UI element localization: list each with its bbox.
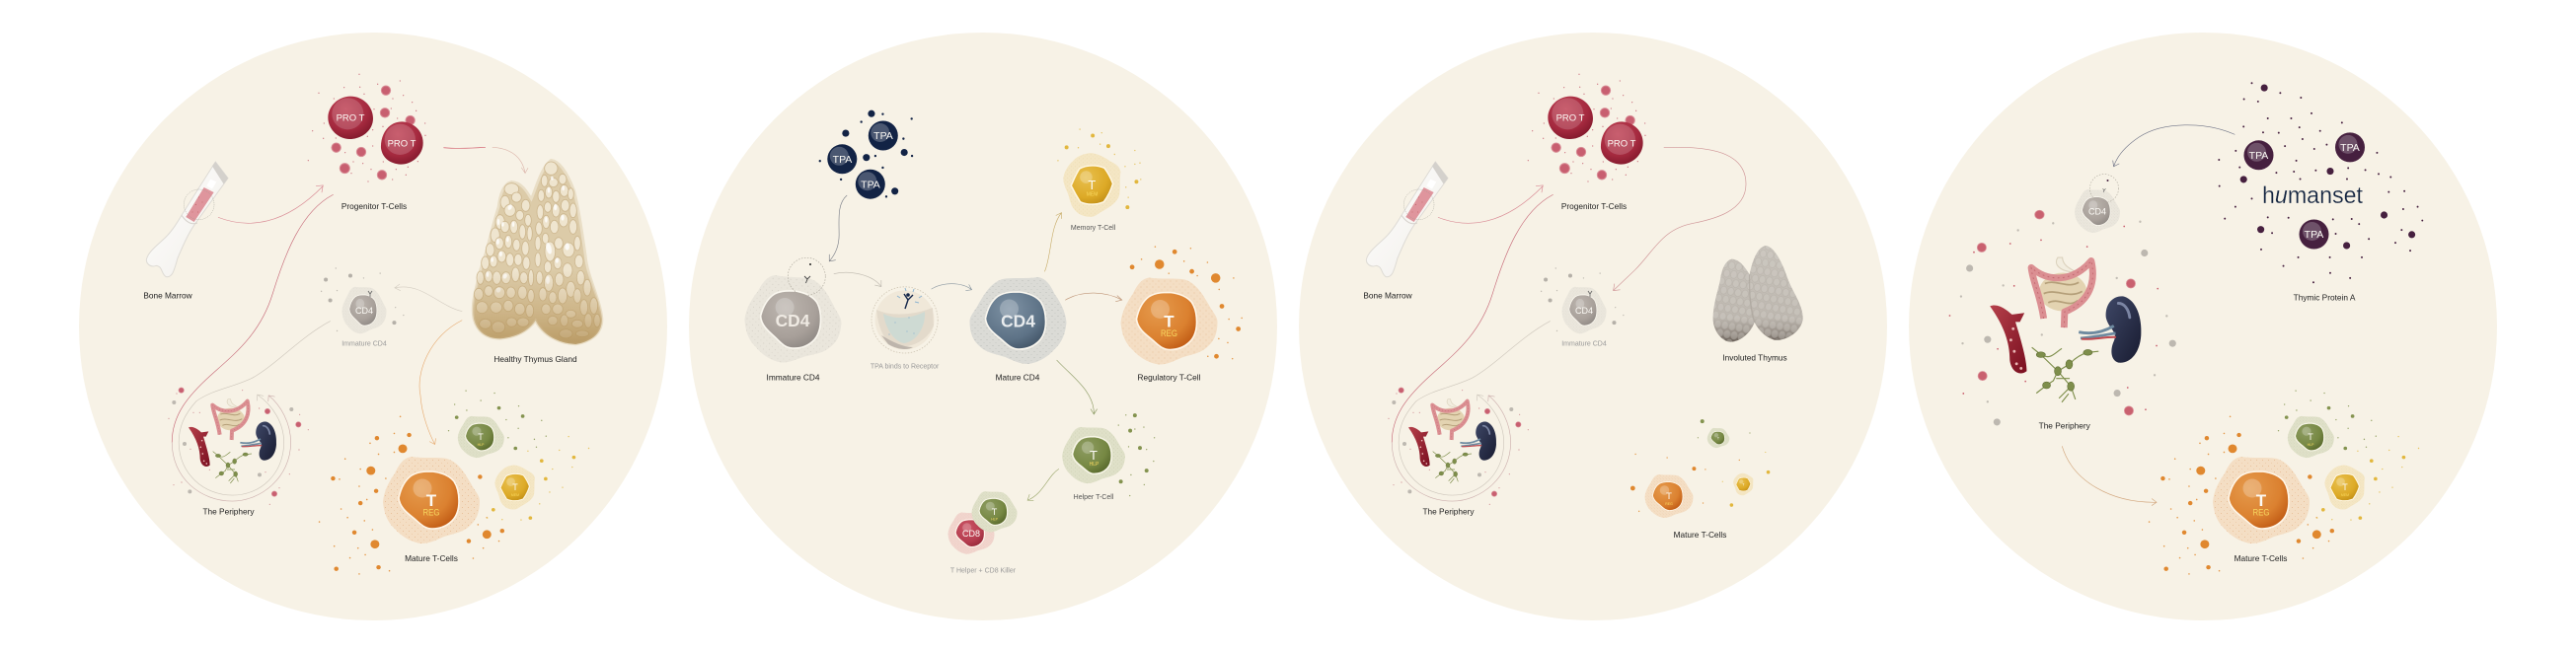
helper T-cell [1062, 413, 1155, 496]
mature T-cells: REG [2252, 507, 2270, 517]
the periphery: organs enlarged [1949, 210, 2176, 425]
TPA molecules: TPA [833, 154, 852, 166]
T helper with CD8 killer: CD8 [962, 529, 980, 539]
mature T-cells [2150, 391, 2419, 574]
mature T-cells: T [2342, 482, 2348, 492]
mature CD4 cell [969, 277, 1066, 364]
label: involuted thymus: Involuted Thymus [1722, 353, 1787, 363]
mature T-cells: T [512, 482, 518, 492]
reduced mature T-cells: T [1717, 436, 1720, 440]
immature CD4 cell: CD4 [355, 306, 373, 316]
panel: healthy thymus pathway [79, 33, 667, 620]
mature T-cells: MEM [2341, 493, 2349, 497]
panel: TPA maturation pathway [689, 33, 1277, 620]
mature T-cells: T [426, 491, 437, 510]
label: regulatory T-cell: Regulatory T-Cell [1138, 373, 1201, 383]
label: memory T-cell: Memory T-Cell [1071, 225, 1116, 232]
progenitor T-cells [1528, 74, 1645, 181]
panel: thymic protein A and periphery [1909, 33, 2497, 620]
progenitor T-cells: PRO T [1556, 112, 1585, 124]
arrow: progenitor to immature CD4 [1614, 147, 1746, 291]
TPA molecules and dots: TPA [2305, 229, 2323, 241]
icon: bone marrow [1366, 162, 1448, 277]
T helper with CD8 killer: HLP [991, 517, 999, 521]
icon: bone marrow [146, 162, 228, 277]
label: helper T-cell: Helper T-Cell [1074, 494, 1114, 501]
immature CD4 large cell [742, 257, 844, 366]
label: T helper + CD8 killer: T Helper + CD8 Killer [950, 568, 1017, 574]
label: progenitor: Progenitor T-Cells [1561, 201, 1627, 211]
label: periphery: The Periphery [202, 507, 255, 517]
reduced mature T-cells: REG [1665, 502, 1673, 506]
immature CD4 cell with receptor [2075, 174, 2120, 233]
T helper with CD8 killer [947, 491, 1018, 554]
regulatory T-cell [1121, 247, 1242, 365]
reduced mature T-cells [1630, 419, 1770, 518]
label: TPA binds to receptor: TPA binds to Receptor [871, 363, 940, 371]
memory T-cell: MEM [1087, 191, 1098, 197]
label: immature CD4: Immature CD4 [341, 341, 387, 347]
panel: involuted thymus pathway [1299, 33, 1887, 620]
label: bone marrow: Bone Marrow [143, 290, 193, 300]
mature T-cells: HLP [2308, 443, 2314, 447]
mature T-cells: HLP [478, 443, 485, 447]
label: mature T-cells: Mature T-Cells [405, 553, 458, 563]
arrows: panel 1 [172, 147, 528, 501]
mature T-cells: T [2308, 432, 2313, 442]
TPA molecules and dots [2219, 83, 2422, 282]
label: mature T-cells: Mature T-Cells [1674, 530, 1726, 540]
logo: humanset: humanset [2262, 182, 2363, 209]
arrows: panel 2 [829, 195, 1122, 501]
TPA molecules: TPA [873, 130, 893, 142]
label: periphery: The Periphery [2039, 420, 2091, 430]
immature CD4 large cell: CD4 [776, 311, 810, 330]
progenitor T-cells: PRO T [337, 112, 365, 124]
label: mature CD4: Mature CD4 [996, 373, 1040, 383]
label: mature T-cells: Mature T-Cells [2235, 553, 2287, 563]
mature T-cells: MEM [511, 493, 519, 497]
label: periphery: The Periphery [1422, 507, 1475, 517]
T helper with CD8 killer: T [992, 507, 998, 517]
label: healthy thymus: Healthy Thymus Gland [493, 354, 577, 364]
label: immature CD4: Immature CD4 [767, 373, 820, 383]
memory T-cell: T [1088, 178, 1096, 192]
regulatory T-cell: REG [1161, 328, 1177, 338]
immature CD4 cell [322, 268, 404, 333]
TPA molecules [820, 110, 912, 199]
mature T-cells: T [478, 432, 484, 442]
thymus gland: healthy [473, 160, 602, 344]
helper T-cell: T [1090, 448, 1098, 463]
immature CD4 cell [1542, 268, 1624, 333]
TPA molecules and dots: TPA [2249, 150, 2268, 162]
arrows: panel 3 [1392, 185, 1553, 501]
the periphery: organs [1389, 388, 1528, 504]
immature CD4 cell: CD4 [1575, 306, 1593, 316]
mature T-cells: REG [422, 507, 440, 517]
TPA binds to receptor icon [871, 287, 938, 353]
the periphery: organs [169, 388, 308, 504]
TPA molecules and dots: TPA [2340, 142, 2360, 154]
helper T-cell: HLP [1090, 462, 1099, 468]
thymus gland: involuted [1713, 246, 1803, 342]
regulatory T-cell: T [1164, 312, 1174, 331]
immature CD4 cell with receptor: CD4 [2088, 207, 2106, 217]
mature T-cells: T [2256, 491, 2267, 510]
TPA molecules: TPA [861, 180, 880, 191]
label: immature CD4: Immature CD4 [1561, 341, 1607, 347]
label: thymic protein A: Thymic Protein A [2294, 292, 2356, 302]
progenitor T-cells: PRO T [1608, 138, 1636, 150]
progenitor T-cells [308, 74, 425, 181]
reduced mature T-cells: T [1742, 483, 1745, 487]
arrows: panel 4 [2062, 125, 2235, 505]
mature T-cells [320, 391, 589, 574]
memory T-cell [1058, 129, 1141, 217]
mature CD4 cell: CD4 [1001, 312, 1035, 331]
reduced mature T-cells: T [1666, 491, 1672, 502]
progenitor T-cells: PRO T [388, 138, 417, 150]
label: bone marrow: Bone Marrow [1363, 290, 1413, 300]
label: progenitor: Progenitor T-Cells [341, 201, 407, 211]
